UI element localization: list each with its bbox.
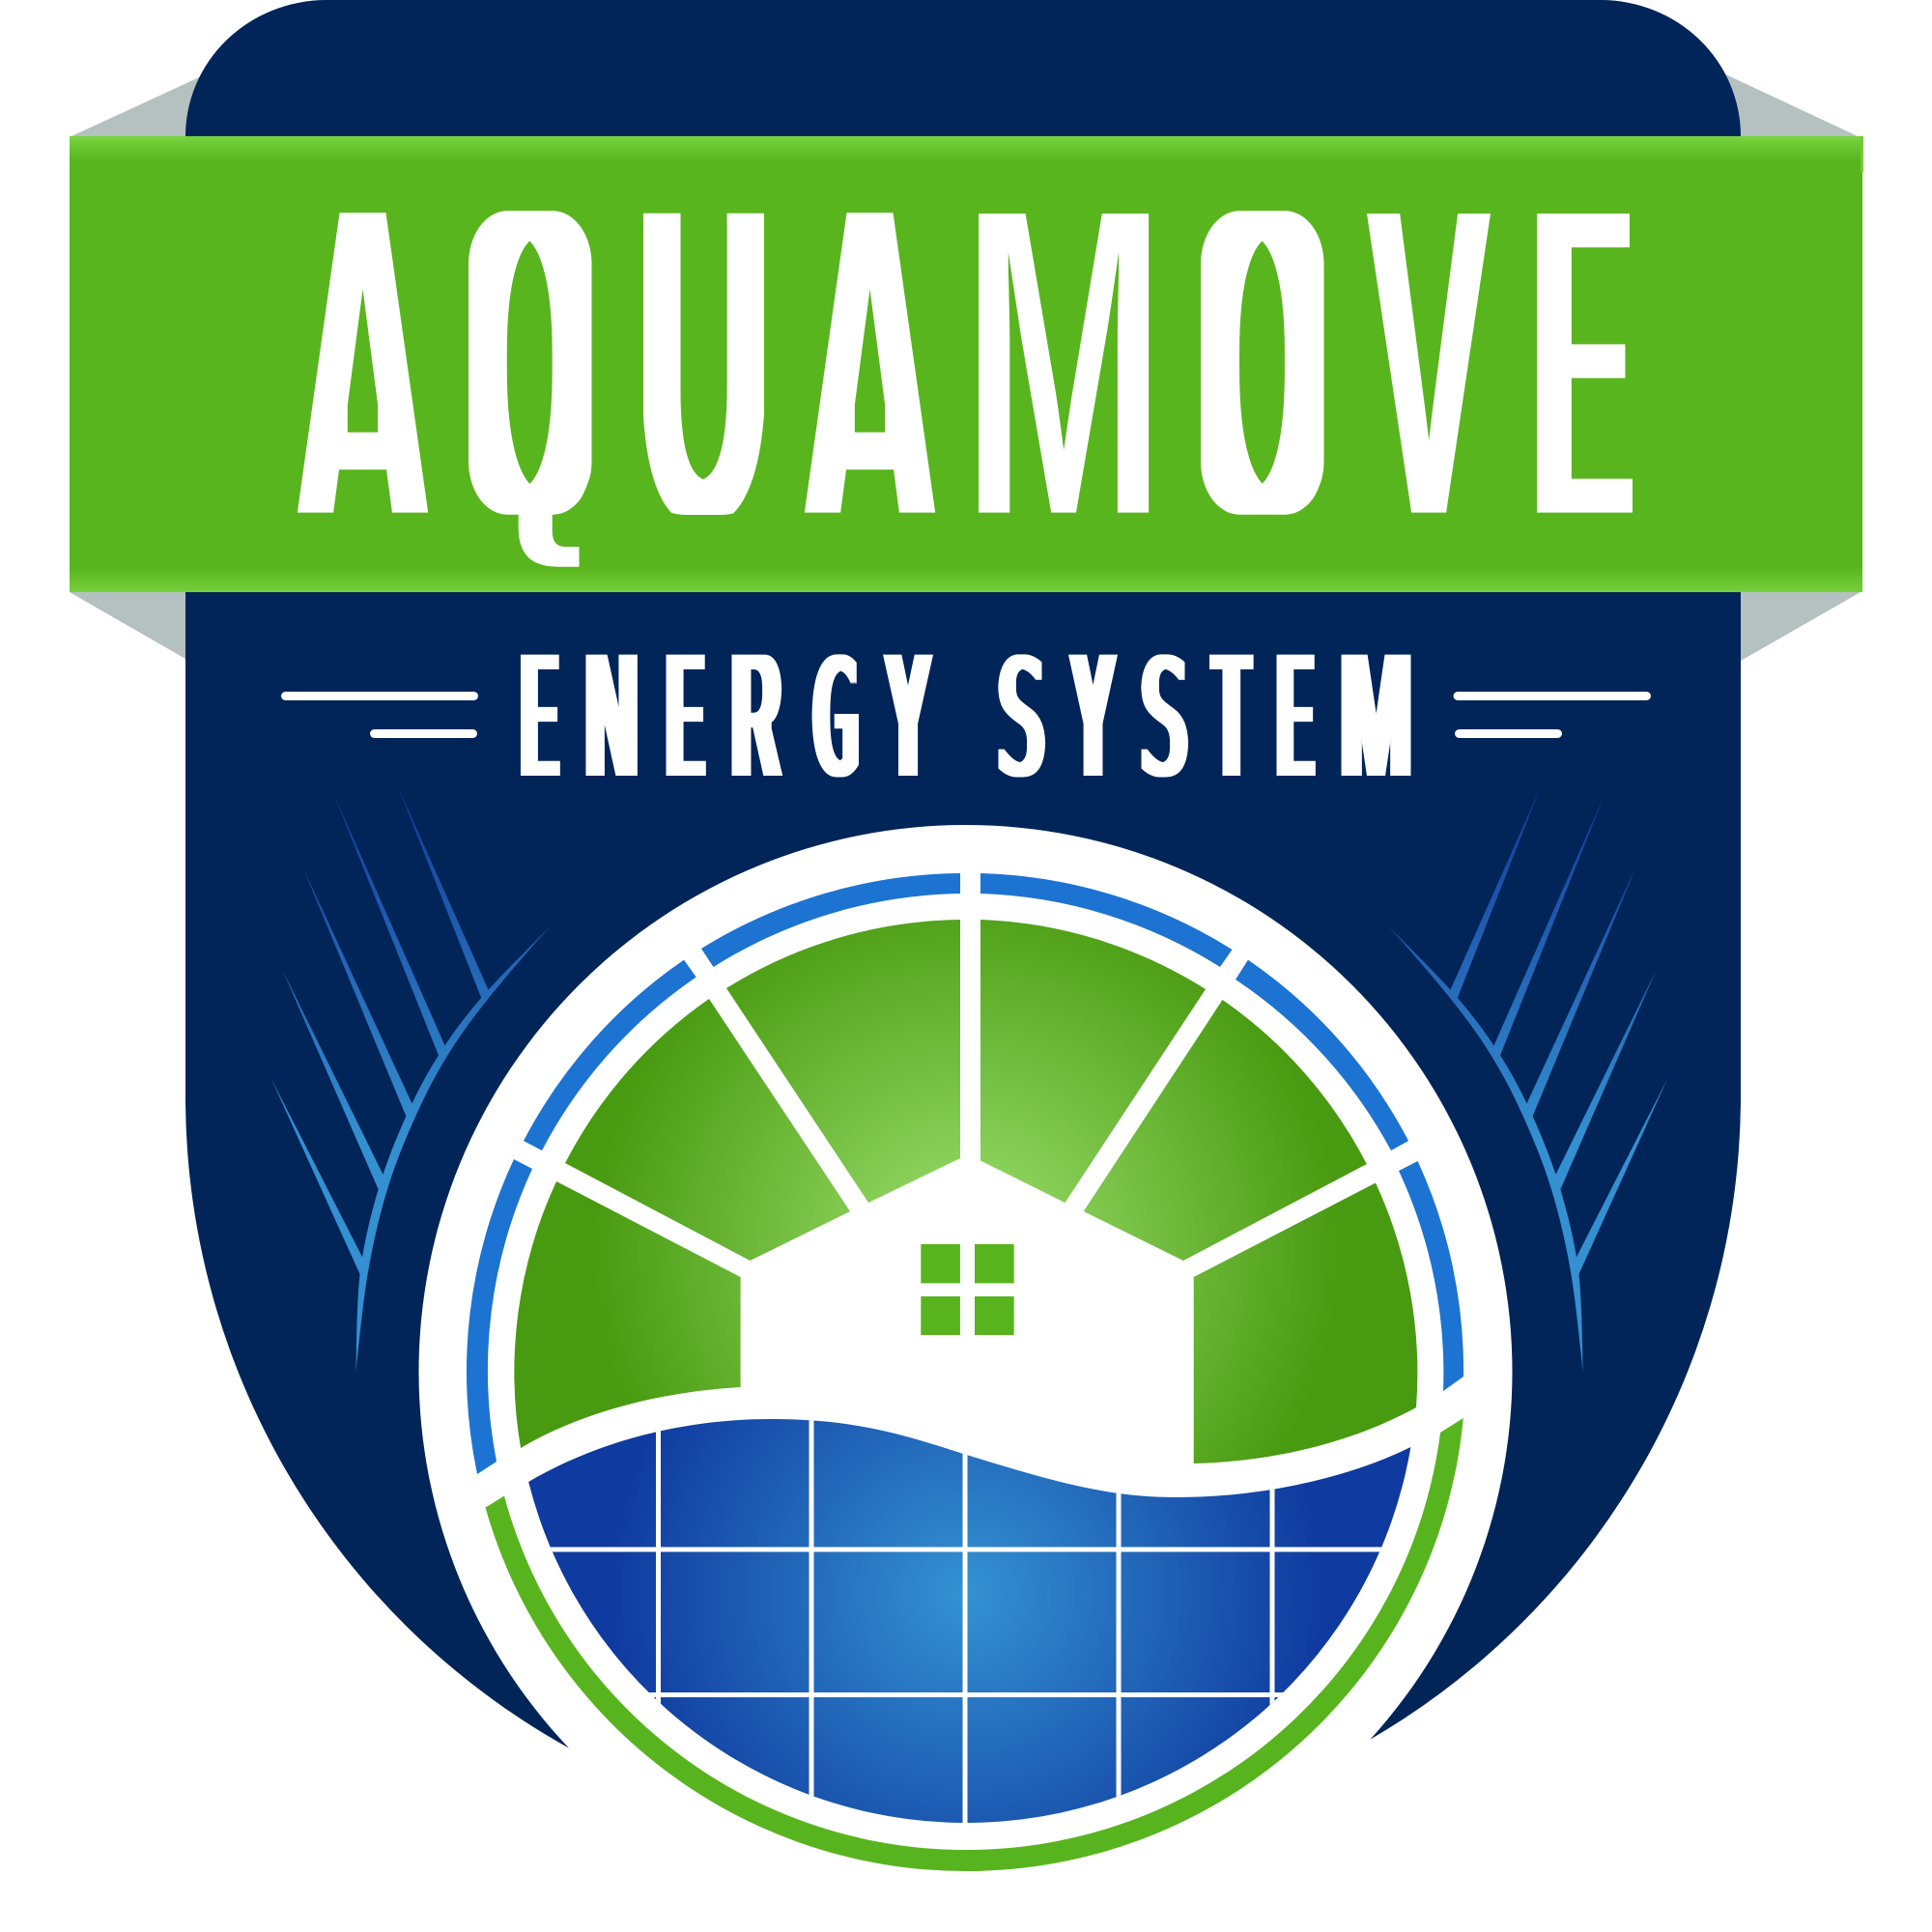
subtitle: ENERGY SYSTEM: E (1278, 611, 1313, 818)
subtitle: ENERGY SYSTEM: Y (1070, 612, 1115, 818)
subtitle: ENERGY SYSTEM: E (522, 611, 557, 818)
speed lines left (281, 692, 478, 738)
title: AQUAMOVE (70, 136, 1863, 592)
banner wordmark (293, 38, 1632, 659)
green lower ring (485, 1418, 1463, 1871)
subtitle: ENERGY SYSTEM: G (810, 619, 860, 818)
speed lines right (1453, 692, 1651, 738)
banner wordmark: V (1367, 104, 1492, 619)
subtitle: ENERGY SYSTEM: T (1213, 613, 1249, 819)
Q tail ornament (519, 510, 580, 567)
subtitle: ENERGY SYSTEM: M (1341, 611, 1411, 818)
banner wordmark: A (800, 104, 941, 659)
solar panel water wave (528, 1419, 1410, 1823)
subtitle: ENERGY SYSTEM: Y (885, 612, 931, 818)
banner wordmark: E (1534, 104, 1632, 619)
subtitle: ENERGY SYSTEM: R (732, 613, 781, 818)
subtitle: ENERGY SYSTEM (522, 611, 1411, 819)
subtitle: ENERGY SYSTEM: S (1139, 619, 1191, 818)
subtitle: ENERGY SYSTEM: E (668, 612, 703, 818)
green banner (70, 136, 1863, 592)
wheat sprig right (1387, 787, 1668, 1372)
banner wordmark: A (293, 104, 434, 659)
banner wordmark: M (962, 104, 1165, 619)
banner wordmark: Q (460, 88, 600, 638)
ribbon fold flaps (70, 71, 1861, 661)
subtitle: ENERGY SYSTEM: S (996, 619, 1048, 818)
banner wordmark: O (1192, 88, 1332, 638)
blue ring segments (467, 873, 1463, 1474)
green roof sunburst segments (514, 920, 1417, 1463)
subtitle: ENERGY SYSTEM: N (585, 611, 638, 818)
house windows (921, 1244, 1014, 1335)
wheat sprig left (270, 787, 552, 1372)
navy shield (185, 0, 1741, 1777)
white emblem disc (419, 825, 1513, 1918)
banner wordmark: U (637, 38, 771, 642)
